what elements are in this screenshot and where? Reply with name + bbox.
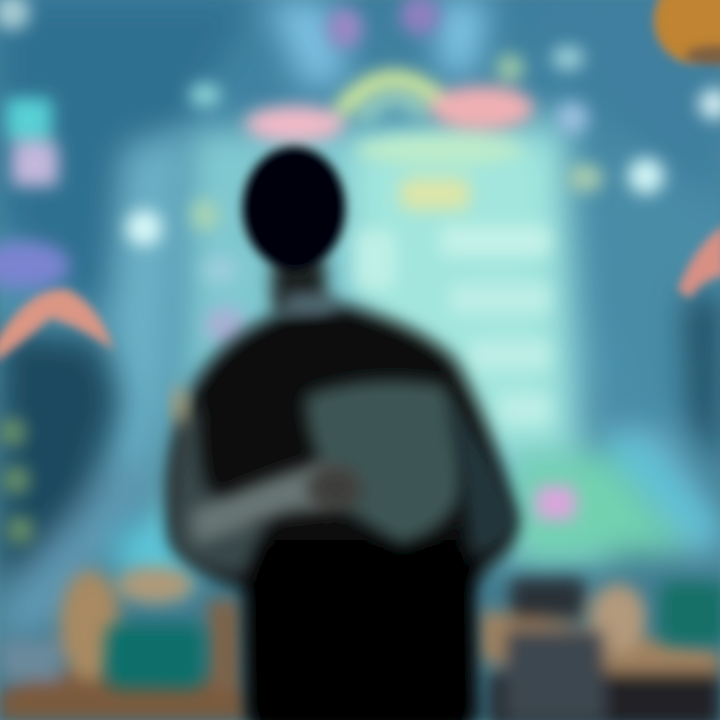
right dark panel <box>600 290 720 560</box>
tablet held in arm <box>305 380 464 545</box>
left dark panel <box>0 330 150 650</box>
lower body <box>250 540 472 720</box>
forearm <box>190 462 360 545</box>
rainbow arc and pink clouds <box>189 0 603 343</box>
left desk and laptop <box>0 567 250 720</box>
person silhouette <box>168 146 518 720</box>
orange sphere, top right <box>654 0 720 65</box>
torso <box>168 304 514 720</box>
laptop screen <box>660 582 720 644</box>
shoulder edge glow <box>172 385 188 425</box>
laptop screen <box>106 624 204 688</box>
pink hand, left <box>0 290 114 362</box>
desk <box>0 567 250 720</box>
right sleeve <box>445 400 518 558</box>
head <box>242 146 346 270</box>
right desk and laptop <box>480 578 720 720</box>
left sleeve <box>171 400 268 576</box>
pink square on floor <box>536 486 576 520</box>
central glowing data panel <box>150 115 610 560</box>
desk <box>480 578 720 720</box>
perspective light rays and side shading <box>0 0 720 530</box>
left coloured tiles <box>0 98 70 289</box>
dim green chart marks, left panel <box>0 420 32 542</box>
floor green band <box>110 440 720 590</box>
hand <box>307 464 363 512</box>
glowing orbs <box>0 0 720 246</box>
pink hand, right <box>678 225 720 298</box>
shoulder highlight <box>282 293 340 314</box>
neck <box>272 255 326 315</box>
stacked bright list rows <box>355 226 550 424</box>
